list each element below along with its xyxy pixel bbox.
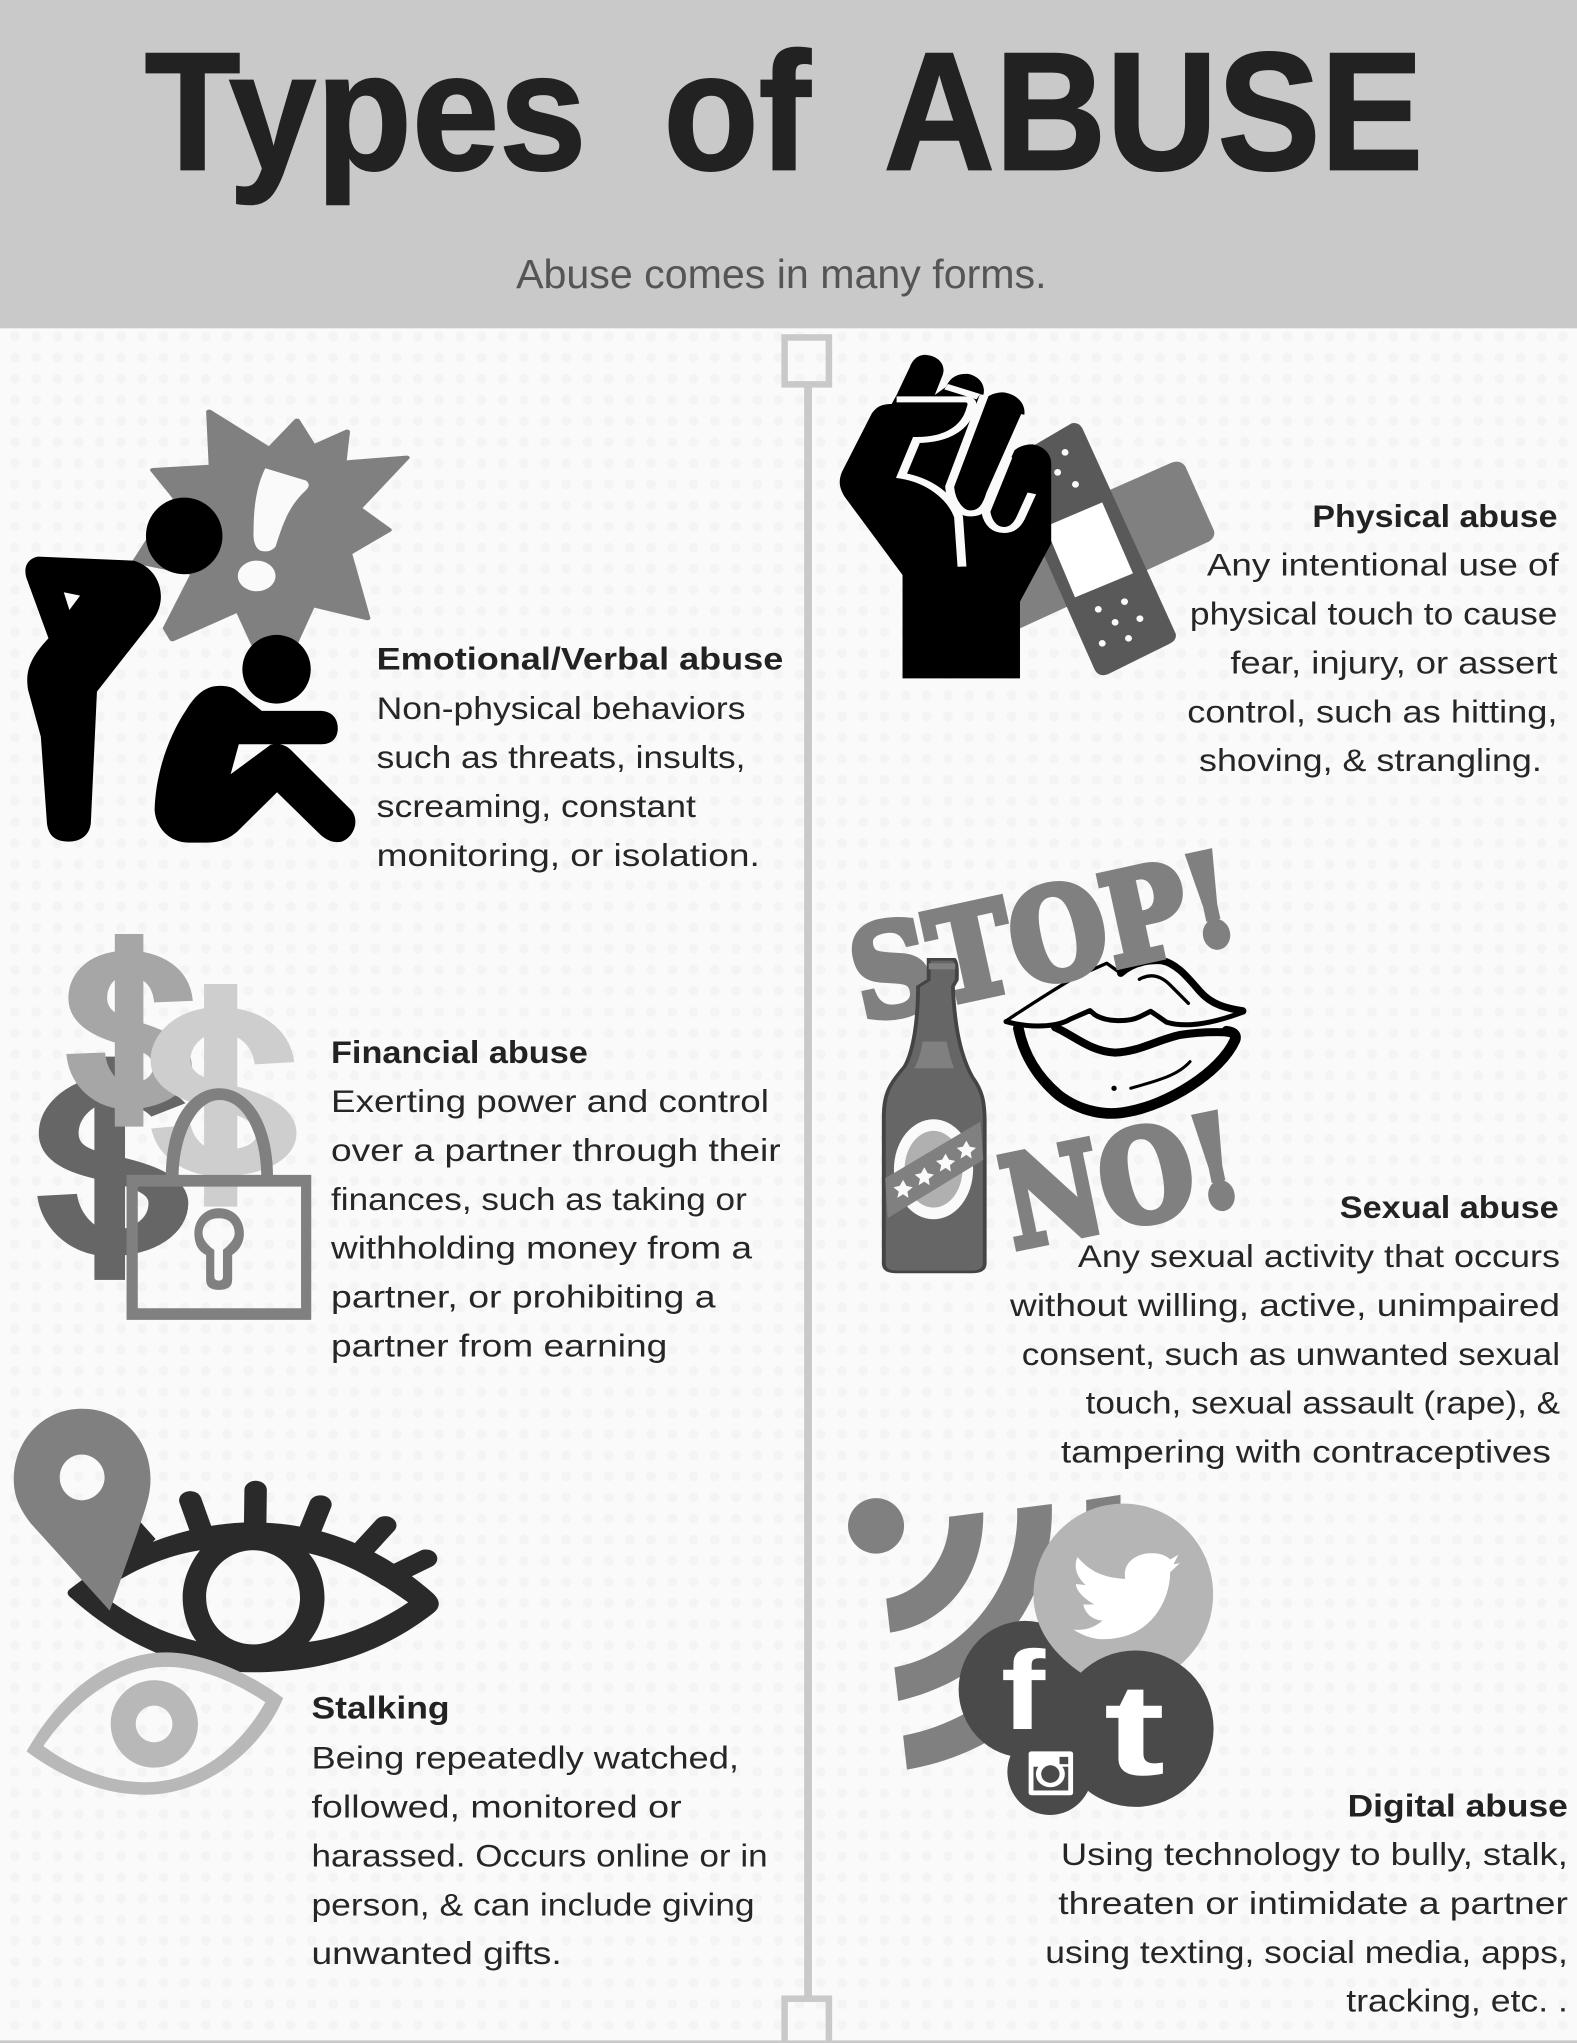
text: digital abuse [1045,1787,1568,2019]
text: financial abuse: withholding money from a [330,1230,752,1266]
text: emotional/verbal abuse: such as threats, insults, [377,739,745,775]
panel: physical abuse [840,355,1559,778]
icon: dollar signs and padlock [57,934,311,1320]
text: financial abuse: Exerting power and control [331,1083,769,1119]
text: tumblr t: t [1104,1657,1165,1803]
text: digital abuse: using texting, social media, apps, [1045,1934,1568,1970]
icon: lips [1006,961,1243,1113]
text: sexual abuse [1009,1189,1560,1470]
text: physical abuse: Physical abuse [1312,498,1557,534]
text: physical abuse: fear, injury, or assert [1230,644,1558,680]
text: digital abuse: threaten or intimidate a partner [1058,1885,1568,1921]
text: stalking: followed, monitored or [311,1789,682,1825]
text: financial abuse: partner from earning [331,1327,667,1363]
panel: emotional/verbal abuse [25,412,783,873]
text: financial abuse: partner, or prohibiting a [331,1278,716,1314]
text: physical abuse: shoving, & strangling. [1199,742,1542,778]
text: emotional/verbal abuse: monitoring, or isolation. [377,837,760,873]
text: emotional/verbal abuse: Non-physical behaviors [377,690,745,726]
text: sexual abuse: tampering with contraceptives [1061,1434,1551,1470]
text: physical abuse: Any intentional use of [1207,547,1559,583]
text: emotional/verbal abuse: screaming, constant [377,788,696,824]
text: sexual abuse: without willing, active, unimpaired [1009,1287,1560,1323]
panel: digital abuse [848,1495,1568,2019]
subtitle: Abuse comes in many forms. [516,251,1047,297]
text: digital abuse: Using technology to bully, stalk, [1061,1836,1568,1872]
text: financial abuse: over a partner through their [331,1132,781,1168]
text: stalking: Stalking [311,1690,450,1726]
text: stalking [311,1690,768,1971]
icon: beer bottle [884,959,985,1272]
text: emotional/verbal abuse: Emotional/Verbal abuse [377,641,783,677]
text: physical abuse: physical touch to cause [1190,596,1557,631]
header banner [0,0,1577,328]
text: stalking: Being repeatedly watched, [311,1740,739,1776]
panel: financial abuse [57,934,781,1363]
text: financial abuse: finances, such as taking or [331,1181,747,1217]
text: sexual abuse: Any sexual activity that occurs [1078,1238,1560,1274]
text: sexual abuse: touch, sexual assault (rape), & [1086,1385,1560,1421]
text: physical abuse: control, such as hitting, [1187,694,1557,730]
text: STOP!: STOP! [838,824,1249,1051]
title: ABUSE [884,17,1423,205]
text: stalking: person, & can include giving [311,1886,755,1922]
text: digital abuse: tracking, etc. . [1346,1983,1568,2019]
text: financial abuse: Financial abuse [331,1034,588,1070]
text: stalking: unwanted gifts. [311,1935,562,1971]
icon: wifi signal and social media badges [848,1495,1214,1815]
title: of [663,17,812,205]
text: sexual abuse: consent, such as unwanted sexual [1022,1336,1560,1372]
text: physical abuse [1187,498,1559,778]
timeline divider [785,337,829,2043]
icon: raised fist with bandage [840,355,1214,678]
text: facebook f: f [1001,1628,1046,1753]
text: financial abuse [330,1034,781,1363]
title [145,17,1423,205]
panel: stalking [14,1409,768,1971]
icon: lips, bottle, STOP and NO [838,824,1252,1278]
text: sexual abuse: Sexual abuse [1340,1189,1559,1225]
icon: eyes and location pin [14,1409,439,1795]
panel: sexual abuse [838,824,1560,1470]
text: emotional/verbal abuse [377,641,783,873]
title: Types [145,17,586,205]
icon: argument figures with burst [25,412,407,843]
text: stalking: harassed. Occurs online or in [311,1837,768,1873]
text: NO!: NO! [990,1086,1252,1278]
text: digital abuse: Digital abuse [1348,1787,1568,1823]
